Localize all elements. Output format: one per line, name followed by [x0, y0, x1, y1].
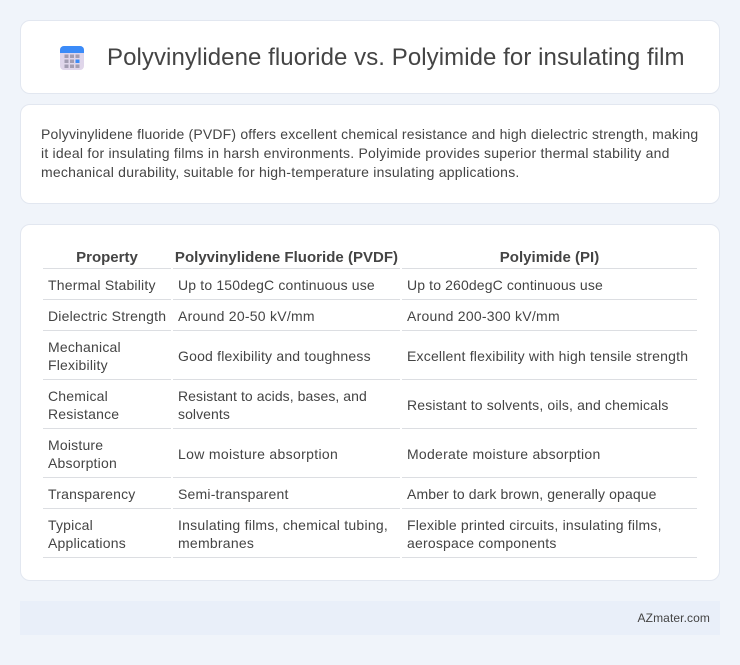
icon: calendar: [60, 46, 84, 70]
footer credit: AZmater.com: [638, 611, 710, 625]
title: Polyvinylidene fluoride vs. Polyimide for insulating film: [107, 44, 685, 71]
table header row: Polyvinylidene Fluoride (PVDF): [175, 249, 398, 266]
row: typical applications: Insulating films, chemical tubing,: [178, 517, 388, 533]
table header row: [76, 249, 599, 266]
row: transparency: [48, 486, 657, 502]
row: moisture absorption: [48, 437, 601, 471]
row: transparency: Amber to dark brown, generally opaque: [407, 486, 657, 502]
row: typical applications: [48, 517, 662, 551]
row: typical applications: membranes: [178, 535, 254, 551]
row: thermal stability: Up to 150degC continuous use: [178, 277, 375, 293]
row: mechanical flexibility: Excellent flexibility with high tensile strength: [407, 348, 688, 364]
row: thermal stability: [48, 277, 603, 293]
intro paragraph: Polyvinylidene fluoride (PVDF) offers excellent chemical resistance and high dielectric strength, making: [41, 126, 698, 142]
row: moisture absorption: Absorption: [48, 455, 117, 471]
row: thermal stability: Thermal Stability: [48, 277, 156, 293]
row: mechanical flexibility: Good flexibility and toughness: [178, 348, 371, 364]
footer bar: [20, 601, 720, 635]
row: transparency: Semi-transparent: [178, 486, 289, 502]
row: dielectric strength: Dielectric Strength: [48, 308, 166, 324]
row: moisture absorption: Moderate moisture absorption: [407, 446, 601, 462]
row: mechanical flexibility: [48, 339, 688, 373]
row: chemical resistance: solvents: [178, 406, 230, 422]
row: dielectric strength: [48, 308, 560, 324]
row: typical applications: aerospace components: [407, 535, 557, 551]
row: dielectric strength: Around 20-50 kV/mm: [178, 308, 315, 324]
panel: intro text: [20, 104, 720, 204]
row: typical applications: Flexible printed circuits, insulating films,: [407, 517, 662, 533]
row: typical applications: Applications: [48, 535, 126, 551]
row: moisture absorption: Moisture: [48, 437, 103, 453]
intro paragraph: [41, 126, 698, 180]
table: [43, 249, 697, 558]
row: mechanical flexibility: Mechanical: [48, 339, 121, 355]
row: transparency: Transparency: [48, 486, 135, 502]
row: dielectric strength: Around 200-300 kV/mm: [407, 308, 560, 324]
row: chemical resistance: Resistant to solvents, oils, and chemicals: [407, 397, 669, 413]
table header row: Polyimide (PI): [500, 249, 599, 266]
row: thermal stability: Up to 260degC continuous use: [407, 277, 603, 293]
intro paragraph: it ideal for insulating films in harsh environments. Polyimide provides superior thermal stability and: [41, 145, 670, 161]
row: typical applications: Typical: [48, 517, 93, 533]
row: chemical resistance: Chemical: [48, 388, 108, 404]
row: chemical resistance: Resistance: [48, 406, 119, 422]
panel: comparison table: [20, 224, 720, 581]
row: mechanical flexibility: Flexibility: [48, 357, 108, 373]
table header row: Property: [76, 249, 138, 266]
row: moisture absorption: Low moisture absorption: [178, 446, 338, 462]
row: chemical resistance: Resistant to acids, bases, and: [178, 388, 367, 404]
row: chemical resistance: [48, 388, 669, 422]
intro paragraph: mechanical durability, suitable for high-temperature insulating applications.: [41, 164, 520, 180]
panel: title header: [20, 20, 720, 94]
